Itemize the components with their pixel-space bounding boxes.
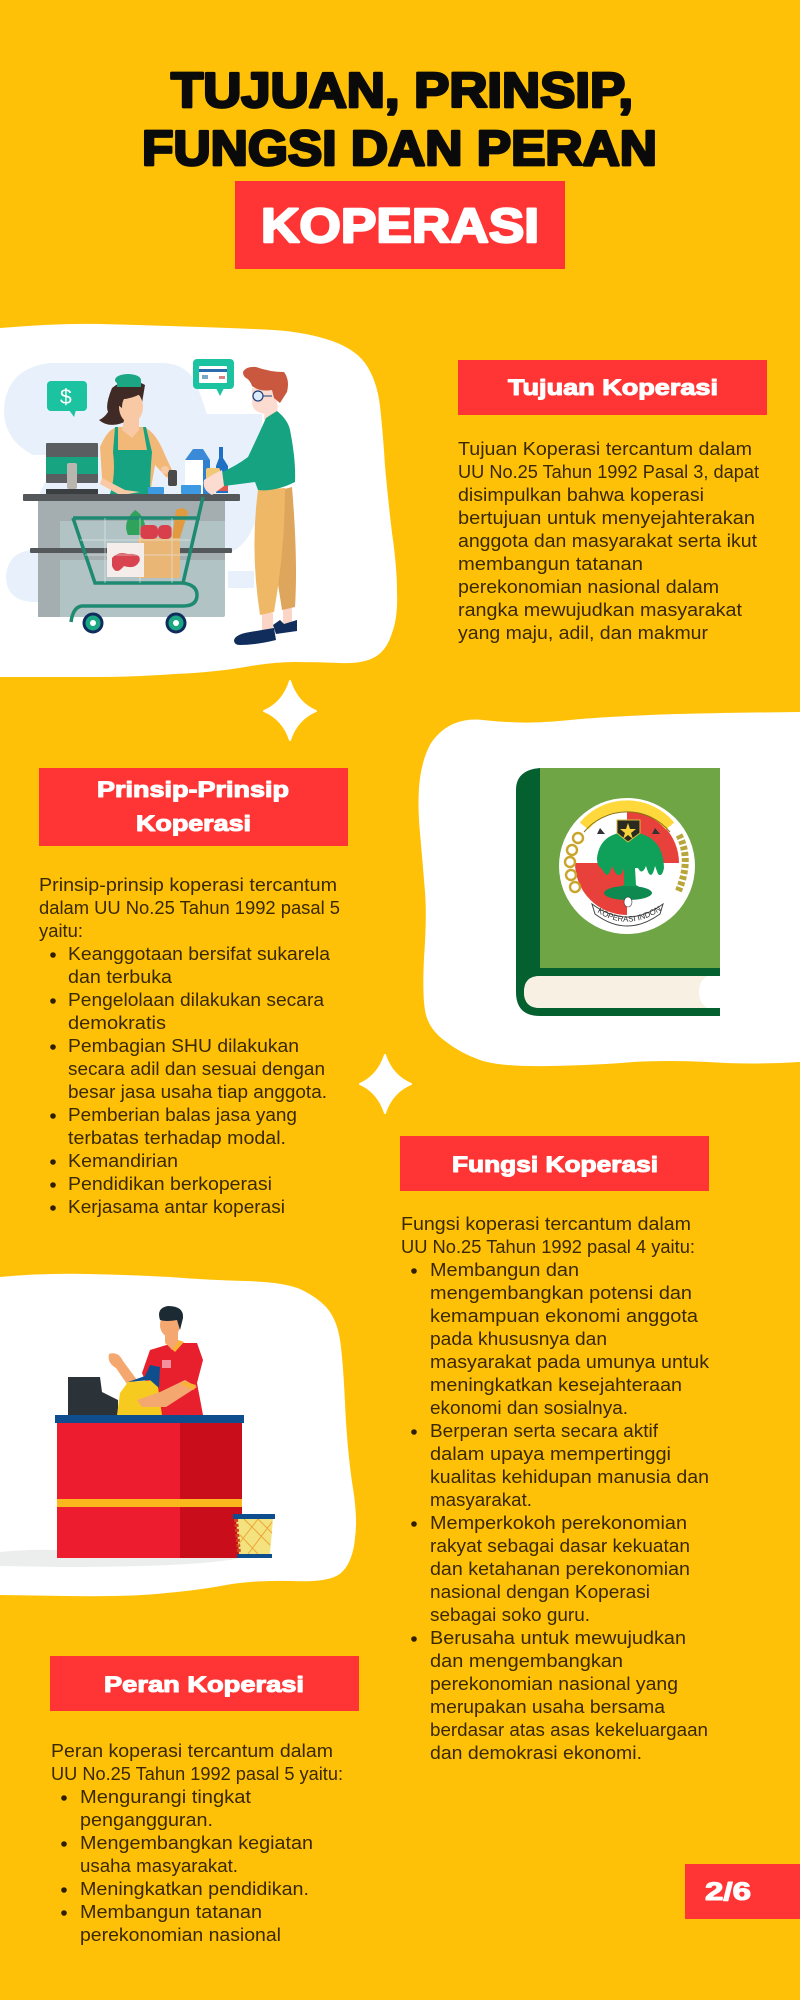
text: fungsi intro — [401, 1213, 695, 1257]
floor shadow — [0, 1550, 240, 1567]
counter — [55, 1415, 244, 1558]
heading: peran: Peran Koperasi — [104, 1672, 304, 1697]
list: fungsi items: perekonomian nasional yang — [430, 1673, 678, 1694]
list: peran items: Membangun tatanan — [80, 1901, 262, 1922]
icon: sparkle 2 — [360, 1055, 411, 1113]
list: fungsi items: mengembangkan potensi dan — [430, 1282, 692, 1303]
panel: peran koperasi — [50, 1656, 359, 1945]
title block — [142, 64, 657, 269]
text: prinsip intro — [39, 874, 340, 941]
shopping cart — [71, 497, 203, 632]
list: fungsi items: Berusaha untuk mewujudkan — [430, 1627, 686, 1648]
list: fungsi items: pada khususnya dan — [430, 1328, 607, 1349]
text: peran intro: Peran koperasi tercantum dalam — [51, 1740, 333, 1761]
list: fungsi items: rakyat sebagai dasar kekuatan — [430, 1535, 690, 1556]
list: fungsi items: Berperan serta secara aktif — [430, 1420, 659, 1441]
page number badge — [685, 1864, 800, 1919]
text: peran intro: UU No.25 Tahun 1992 pasal 5 yaitu: — [51, 1763, 343, 1784]
panel: supermarket checkout illustration — [0, 324, 397, 677]
list: fungsi items: dan mengembangkan — [430, 1650, 623, 1671]
text: fungsi intro: UU No.25 Tahun 1992 pasal 4 yaitu: — [401, 1236, 695, 1257]
title block: TUJUAN, PRINSIP, — [171, 64, 633, 118]
text: prinsip intro: Prinsip-prinsip koperasi tercantum — [39, 874, 337, 895]
title block: KOPERASI — [261, 200, 539, 253]
heading: prinsip: Koperasi — [136, 811, 251, 836]
list: prinsip items: Pengelolaan dilakukan secara — [68, 989, 325, 1010]
list: fungsi items: masyarakat. — [430, 1489, 532, 1510]
list: fungsi items: kualitas kehidupan manusia dan — [430, 1466, 709, 1487]
list: prinsip items: terbatas terhadap modal. — [68, 1127, 286, 1148]
list: peran items: Mengurangi tingkat — [80, 1786, 251, 1807]
cash register monitor — [46, 443, 98, 494]
list: fungsi items: ekonomi dan sosialnya. — [430, 1397, 628, 1418]
cashier man — [109, 1306, 203, 1415]
cashier woman — [99, 374, 177, 494]
list: peran items — [61, 1786, 313, 1945]
list: fungsi items: dan demokrasi ekonomi. — [430, 1742, 642, 1763]
text: tujuan body: perekonomian nasional dalam — [458, 576, 719, 597]
panel: prinsip koperasi — [39, 768, 348, 1217]
list: prinsip items: secara adil dan sesuai dengan — [68, 1058, 325, 1079]
waste basket — [233, 1514, 275, 1558]
panel: cashier illustration — [0, 1274, 356, 1596]
list: prinsip items: Kerjasama antar koperasi — [68, 1196, 285, 1217]
list: peran items: Meningkatkan pendidikan. — [80, 1878, 309, 1899]
text: tujuan body — [458, 438, 759, 643]
text: fungsi intro: Fungsi koperasi tercantum dalam — [401, 1213, 691, 1234]
list: fungsi items: meningkatkan kesejahteraan — [430, 1374, 682, 1395]
list: peran items: pengangguran. — [80, 1809, 213, 1830]
heading: prinsip — [39, 768, 348, 846]
heading: tujuan — [458, 360, 767, 415]
icon: koperasi indonesia emblem: KOPERASI INDONESIA — [598, 906, 661, 922]
icon: dollar speech bubble: $ — [60, 386, 72, 409]
list: prinsip items: Pemberian balas jasa yang — [68, 1104, 297, 1125]
heading: tujuan: Tujuan Koperasi — [508, 375, 718, 400]
panel: book illustration — [418, 712, 800, 1066]
text: tujuan body: bertujuan untuk menyejahterakan — [458, 507, 755, 528]
list: fungsi items: kemampuan ekonomi anggota — [430, 1305, 699, 1326]
text: tujuan body: Tujuan Koperasi tercantum dalam — [458, 438, 752, 459]
text: prinsip intro: dalam UU No.25 Tahun 1992 pasal 5 — [39, 897, 340, 918]
list: fungsi items: Membangun dan — [430, 1259, 579, 1280]
list: fungsi items — [411, 1259, 710, 1763]
list: fungsi items: berdasar atas asas kekeluargaan — [430, 1719, 708, 1740]
text: tujuan body: rangka mewujudkan masyarakat — [458, 599, 742, 620]
customer man — [204, 367, 297, 645]
list: prinsip items: Keanggotaan bersifat sukarela — [68, 943, 331, 964]
text: tujuan body: membangun tatanan — [458, 553, 643, 574]
page number badge: 2/6 — [705, 1878, 751, 1906]
list: prinsip items: Pembagian SHU dilakukan — [68, 1035, 299, 1056]
title block: FUNGSI DAN PERAN — [142, 122, 657, 176]
list: prinsip items: Pendidikan berkoperasi — [68, 1173, 272, 1194]
list: fungsi items: dan ketahanan perekonomian — [430, 1558, 690, 1579]
cash register — [68, 1377, 118, 1415]
heading: fungsi: Fungsi Koperasi — [452, 1152, 658, 1177]
list: fungsi items: merupakan usaha bersama — [430, 1696, 666, 1717]
list: fungsi items: Memperkokoh perekonomian — [430, 1512, 687, 1533]
list: fungsi items: nasional dengan Koperasi — [430, 1581, 650, 1602]
text: prinsip intro: yaitu: — [39, 920, 83, 941]
text: peran intro — [51, 1740, 343, 1784]
heading: prinsip: Prinsip-Prinsip — [97, 777, 289, 802]
icon: card speech bubble — [193, 359, 234, 396]
text: tujuan body: yang maju, adil, dan makmur — [458, 622, 708, 643]
list: prinsip items: dan terbuka — [68, 966, 173, 987]
icon: dollar speech bubble — [47, 381, 87, 417]
list: fungsi items: dalam upaya mempertinggi — [430, 1443, 671, 1464]
panel: fungsi koperasi — [400, 1136, 710, 1763]
list: fungsi items: masyarakat pada umunya untuk — [430, 1351, 710, 1372]
book — [516, 768, 720, 1016]
list: prinsip items — [50, 943, 331, 1217]
heading: fungsi — [400, 1136, 709, 1191]
list: prinsip items: Kemandirian — [68, 1150, 178, 1171]
list: peran items: Mengembangkan kegiatan — [80, 1832, 313, 1853]
groceries on counter — [148, 447, 228, 494]
text: tujuan body: UU No.25 Tahun 1992 Pasal 3, dapat — [458, 461, 759, 482]
list: peran items: usaha masyarakat. — [80, 1855, 238, 1876]
list: prinsip items: demokratis — [68, 1012, 166, 1033]
list: peran items: perekonomian nasional — [80, 1924, 281, 1945]
list: prinsip items: besar jasa usaha tiap anggota. — [68, 1081, 327, 1102]
list: fungsi items: sebagai soko guru. — [430, 1604, 590, 1625]
text: tujuan body: anggota dan masyarakat serta ikut — [458, 530, 757, 551]
panel: tujuan koperasi — [458, 360, 767, 643]
icon: koperasi indonesia emblem — [559, 798, 695, 934]
counter — [23, 494, 240, 617]
text: tujuan body: disimpulkan bahwa koperasi — [458, 484, 704, 505]
heading: peran — [50, 1656, 359, 1711]
icon: sparkle 1 — [264, 681, 316, 740]
